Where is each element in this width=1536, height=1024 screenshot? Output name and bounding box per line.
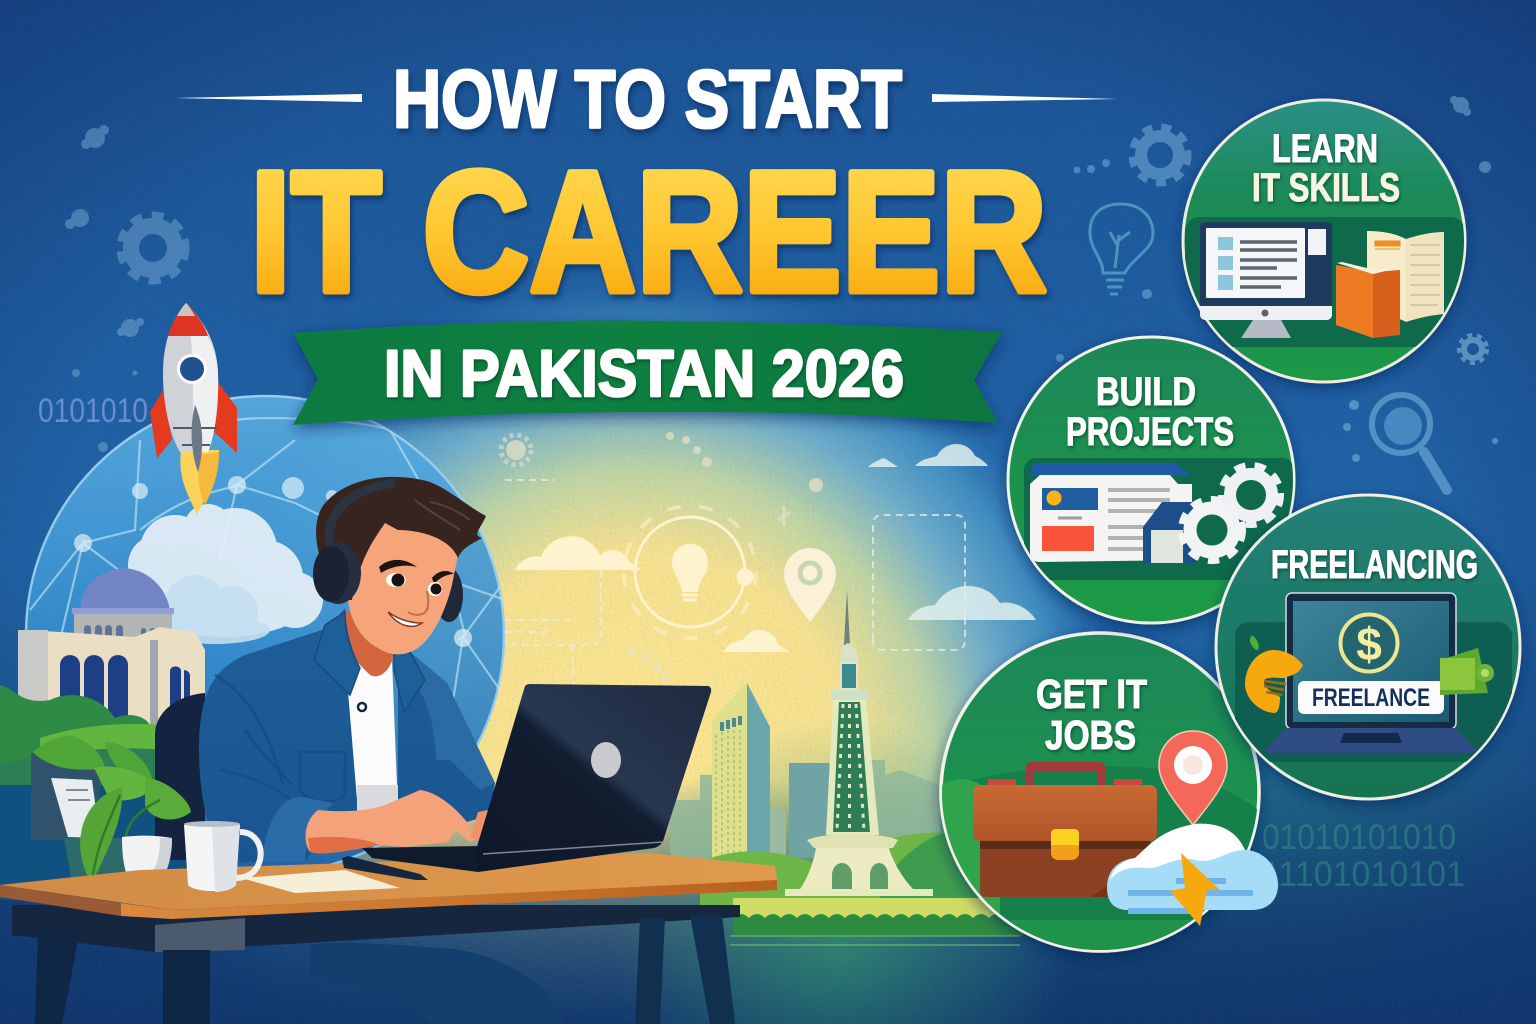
jacket details: [215, 675, 345, 802]
panel backdrop: [1235, 622, 1512, 762]
paper and pen: [241, 856, 428, 893]
binary text right: 01010101010: [1262, 818, 1456, 857]
icon: orange crescent shape: [1245, 635, 1303, 713]
icon: cloud with lightning: [1107, 824, 1278, 926]
panel: freelancing: [1216, 495, 1520, 799]
icon: green wallet: [1440, 648, 1494, 695]
panel: build projects: [1008, 337, 1294, 623]
title line 1: HOW TO START: [393, 54, 902, 145]
floating sky icons: clouds, bulb and pin: [501, 432, 1036, 690]
decorative icon: small gear right: [1459, 335, 1487, 363]
heading: BUILD: [1096, 370, 1196, 414]
icon: gears: [1182, 466, 1280, 560]
binary text right: 11101010101: [1262, 855, 1465, 894]
freelance label: FREELANCE: [1312, 684, 1430, 712]
person at laptop: [155, 477, 495, 862]
hair: [316, 477, 486, 600]
heading: PROJECTS: [1066, 410, 1234, 454]
icon: laptop: [1265, 593, 1476, 753]
icon: dollar coin: [1340, 614, 1398, 672]
panel: get IT jobs: [935, 633, 1270, 960]
freelance label: [1298, 681, 1444, 714]
face: [347, 520, 460, 654]
plant and tablet stand: [31, 736, 191, 885]
forearm and hand: [306, 790, 478, 853]
decorative icon: magnifying glass: [1343, 395, 1498, 490]
headphone right cup: [435, 568, 463, 622]
icon: floppy disk: [1143, 502, 1196, 563]
panel backdrop: [1024, 458, 1294, 580]
ribbon banner: [293, 320, 1002, 425]
mug: [184, 821, 261, 892]
headphones: [329, 483, 395, 548]
city skyline: [670, 683, 940, 860]
green ground and fence: [700, 832, 1023, 945]
decorative icon: gear upper left: [120, 215, 186, 281]
decorative icon: puzzle shapes left: [65, 125, 144, 452]
facial features: [379, 560, 454, 584]
heading: [1252, 127, 1400, 210]
neck: [345, 610, 395, 676]
icon: briefcase: [973, 762, 1157, 897]
heading: IT SKILLS: [1252, 166, 1400, 210]
icon: books: [1336, 231, 1444, 338]
icon: location pin: [1159, 731, 1227, 825]
icon: rocket: [150, 303, 237, 515]
lower left shade: [0, 785, 200, 900]
panel: learn IT skills: [1183, 100, 1465, 382]
banner text: IN PAKISTAN 2026: [384, 336, 904, 410]
panel backdrop: [1185, 217, 1465, 347]
icon: web page: [1030, 463, 1192, 562]
icon: dollar coin: $: [1356, 618, 1382, 670]
desk: [0, 853, 777, 1024]
heading: [1036, 671, 1147, 758]
title rules: [175, 94, 1118, 102]
hills and bushes: [0, 685, 165, 800]
decorative icon: puzzle pieces right: [1056, 96, 1491, 362]
decorative icon: light bulb: [1090, 204, 1153, 294]
heading: JOBS: [1045, 712, 1136, 758]
heading: [1066, 370, 1234, 454]
hill backdrop: [942, 766, 1258, 950]
binary text left: 0101010: [38, 392, 148, 430]
rocket smoke cloud: [128, 504, 323, 644]
icon: monitor: [1200, 222, 1332, 338]
chair: [155, 693, 205, 860]
t-shirt: [345, 655, 398, 812]
collar: [314, 612, 425, 712]
monument: Minar-e-Pakistan: [785, 590, 933, 896]
heading: GET IT: [1036, 671, 1147, 717]
building: mausoleum: [18, 568, 205, 730]
binary text right: [1262, 818, 1465, 894]
title line 2: IT CAREER: [250, 136, 1047, 328]
globe network: [25, 395, 505, 875]
laptop: [362, 684, 711, 872]
decorative icon: gear upper right: [1074, 127, 1188, 183]
heading: LEARN: [1272, 127, 1378, 171]
sleeve cuff: [262, 797, 334, 862]
jacket: [199, 608, 495, 862]
